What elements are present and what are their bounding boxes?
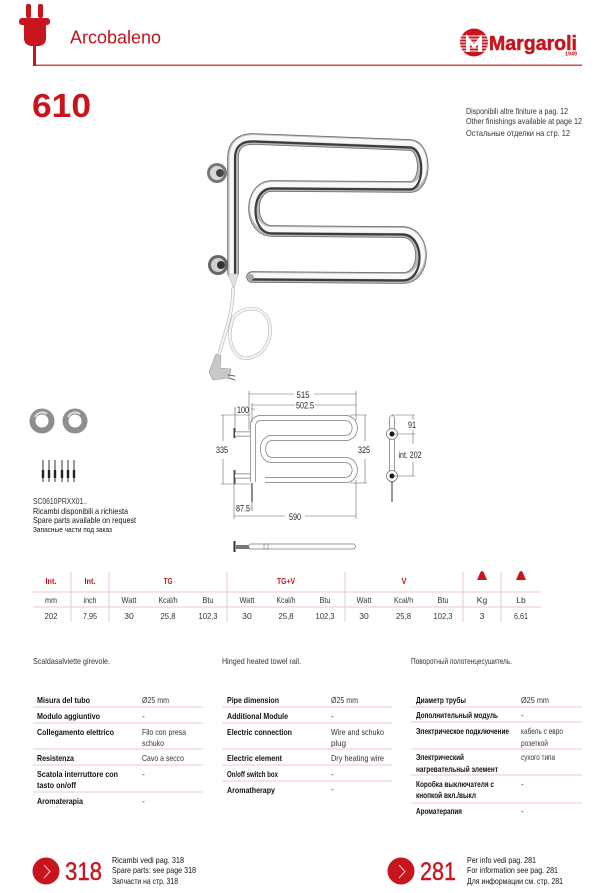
table header: TG+V xyxy=(277,577,296,586)
panel: Italian specifications xyxy=(33,695,203,806)
panel: English specifications: - xyxy=(331,784,334,794)
logo: Margaroli xyxy=(460,28,577,58)
units row: Watt xyxy=(122,595,137,605)
finishes note: Остальные отделки на стр. 12 xyxy=(466,128,570,138)
panel: Russian specifications xyxy=(411,695,582,816)
panel: Russian specifications: Электрическое подключение xyxy=(416,726,509,736)
spare parts text: Ricambi disponibili a richiesta xyxy=(33,506,128,516)
product photo: towel rail xyxy=(207,138,424,380)
spare parts text xyxy=(33,496,137,534)
panel: Russian specifications: сухого типа xyxy=(521,752,555,762)
panel: Italian specifications: tasto on/off xyxy=(37,780,76,790)
values row: 30 xyxy=(359,611,369,621)
panel: Russian specifications: Ароматерапия xyxy=(416,806,462,816)
values row: 102,3 xyxy=(198,611,218,621)
units row: Kcal/h xyxy=(276,595,296,605)
panel: Italian specifications: Modulo aggiuntivo xyxy=(37,711,100,721)
units row: Kg xyxy=(477,595,487,605)
dimension labels: 502.5 xyxy=(296,400,314,410)
values row: 202 xyxy=(44,611,58,621)
section title: Arcobaleno xyxy=(70,28,161,48)
panel: Italian specifications: Resistenza xyxy=(37,753,74,763)
values row: 102,3 xyxy=(434,611,453,621)
spare parts text: Spare parts available on request xyxy=(33,515,137,525)
values row: 6,61 xyxy=(514,611,528,621)
values row: 30 xyxy=(242,611,252,621)
descriptions: Hinged heated towel rail. xyxy=(222,656,301,666)
data table xyxy=(33,571,541,622)
logo: Margaroli: Margaroli xyxy=(489,33,577,55)
icon: weight bells xyxy=(477,571,526,580)
units row: Btu xyxy=(202,595,214,605)
panel: English specifications: Aromatherapy xyxy=(227,785,275,795)
panel: Italian specifications: Aromaterapia xyxy=(37,796,83,806)
table grid xyxy=(33,572,541,622)
page number: 281 xyxy=(420,858,456,886)
dimension labels: int. 202 xyxy=(398,450,422,460)
table header: Int. xyxy=(84,577,96,586)
units row: Kcal/h xyxy=(158,595,178,605)
panel: Italian specifications: Scatola interruttore con xyxy=(37,769,118,779)
dimension labels: 515 xyxy=(296,390,310,400)
panel: Russian specifications: Ø25 mm xyxy=(521,695,549,705)
values row: 25,8 xyxy=(160,611,176,621)
icon: wall mounts xyxy=(207,163,228,275)
dimension labels: 100 xyxy=(237,405,249,415)
reference text xyxy=(112,855,196,886)
icon: arrow circle xyxy=(388,858,414,884)
units row: Watt xyxy=(356,595,372,605)
reference text: Spare parts: see page 318 xyxy=(112,865,196,875)
units row: mm xyxy=(45,595,57,605)
reference text: Per info vedi pag. 281 xyxy=(467,855,536,865)
panel: English specifications: Electric element xyxy=(227,753,282,763)
panel: Italian specifications: - xyxy=(142,711,145,721)
panel: English specifications: - xyxy=(331,769,334,779)
panel: Italian specifications: - xyxy=(142,796,145,806)
reference text xyxy=(467,855,563,886)
values row: 3 xyxy=(480,611,485,621)
callout: information page 281 xyxy=(388,855,563,886)
panel: Russian specifications: - xyxy=(521,806,524,816)
panel: English specifications: Wire and schuko xyxy=(331,727,384,737)
finishes note: Disponibili altre finiture a pag. 12 xyxy=(466,106,568,116)
spare parts text: Запасные части под заказ xyxy=(33,525,112,534)
header rule xyxy=(33,65,582,66)
reference text: Запчасти на стр. 318 xyxy=(112,876,178,886)
panel: Italian specifications: schuko xyxy=(142,738,164,748)
units row: inch xyxy=(84,595,97,605)
dimension labels: 87.5 xyxy=(236,504,250,514)
table header: V xyxy=(402,577,407,586)
panel: Russian specifications: нагревательный элемент xyxy=(416,764,498,774)
logo: Margaroli: 1949 xyxy=(565,52,577,58)
panel: English specifications: Additional Module xyxy=(227,711,288,721)
panel: Italian specifications: Cavo a secco xyxy=(142,753,184,763)
reference text: For information see pag. 281 xyxy=(467,865,558,875)
dimension lines xyxy=(221,391,367,519)
panel: Russian specifications: Дополнительный модуль xyxy=(416,710,498,720)
spare parts xyxy=(32,412,137,534)
side view xyxy=(386,415,415,502)
panel: Russian specifications: Электрический xyxy=(416,752,464,762)
panel: Italian specifications: - xyxy=(142,769,145,779)
descriptions: Scaldasalviette girevole. xyxy=(33,656,110,666)
table header: Int. xyxy=(46,577,56,586)
finishes note xyxy=(466,106,582,138)
header xyxy=(19,4,582,66)
reference text: Ricambi vedi pag. 318 xyxy=(112,855,184,865)
values row: 102,3 xyxy=(316,611,335,621)
reference text: Для информации см. стр. 281 xyxy=(467,876,563,886)
panel: English specifications: On/off switch box xyxy=(227,769,278,779)
panel: Russian specifications: - xyxy=(521,779,524,789)
icon: red plug with cord xyxy=(19,4,50,66)
spare parts text: SC0610PRXX01.. xyxy=(33,496,87,506)
panel: English specifications xyxy=(222,695,392,795)
values row: 30 xyxy=(124,611,134,621)
panel: Russian specifications: кнопкой вкл./выкл xyxy=(416,790,476,800)
panel: Russian specifications: кабель с евро xyxy=(521,726,563,736)
values row xyxy=(44,611,528,621)
values row: 25,8 xyxy=(396,611,411,621)
finishes note: Other finishings available at page 12 xyxy=(466,116,582,126)
page number: 318 xyxy=(65,858,102,886)
units row: Kcal/h xyxy=(394,595,413,605)
top view xyxy=(234,541,356,552)
units row: Watt xyxy=(240,595,255,605)
callout: spare parts page 318 xyxy=(32,855,196,886)
panel: English specifications: Pipe dimension xyxy=(227,695,279,705)
panel: Italian specifications: Collegamento elettrico xyxy=(37,727,114,737)
panel: Russian specifications: Диаметр трубы xyxy=(416,695,466,705)
panel: English specifications: Electric connection xyxy=(227,727,292,737)
dimension labels: 91 xyxy=(408,420,416,430)
technical drawing xyxy=(216,390,422,552)
panel: English specifications: - xyxy=(331,711,334,721)
panel: Italian specifications: Filo con presa xyxy=(142,727,186,737)
panel: Russian specifications: Коробка выключателя с xyxy=(416,779,494,789)
units row: Btu xyxy=(438,595,449,605)
dimension labels: 335 xyxy=(216,445,228,455)
icon: wall rosettes xyxy=(32,412,84,430)
dimension labels: 325 xyxy=(358,445,370,455)
icon: arrow circle xyxy=(32,858,60,884)
table header xyxy=(46,577,407,586)
dimension labels: 590 xyxy=(289,512,301,522)
descriptions xyxy=(33,656,512,666)
front view xyxy=(234,418,355,502)
dimension labels xyxy=(216,390,422,522)
descriptions: Поворотный полотенцесушитель. xyxy=(411,656,512,666)
panel: Italian specifications: Ø25 mm xyxy=(142,695,169,705)
units row: Btu xyxy=(320,595,331,605)
values row: 25,8 xyxy=(278,611,294,621)
power cable and schuko plug xyxy=(209,274,270,380)
panel: Russian specifications: - xyxy=(521,710,524,720)
panel: Russian specifications: розеткой xyxy=(521,738,548,748)
panel: English specifications: Dry heating wire xyxy=(331,753,384,763)
icon: screws and plugs xyxy=(43,460,74,482)
panel: Italian specifications: Misura del tubo xyxy=(37,695,90,705)
table header: TG xyxy=(164,577,172,586)
panel: English specifications: plug xyxy=(331,738,346,748)
model number: 610 xyxy=(32,87,91,124)
rail tube xyxy=(232,138,424,280)
panel: English specifications: Ø25 mm xyxy=(331,695,358,705)
units row: Lb xyxy=(516,595,526,605)
values row: 7,95 xyxy=(83,611,97,621)
units row xyxy=(45,595,526,605)
